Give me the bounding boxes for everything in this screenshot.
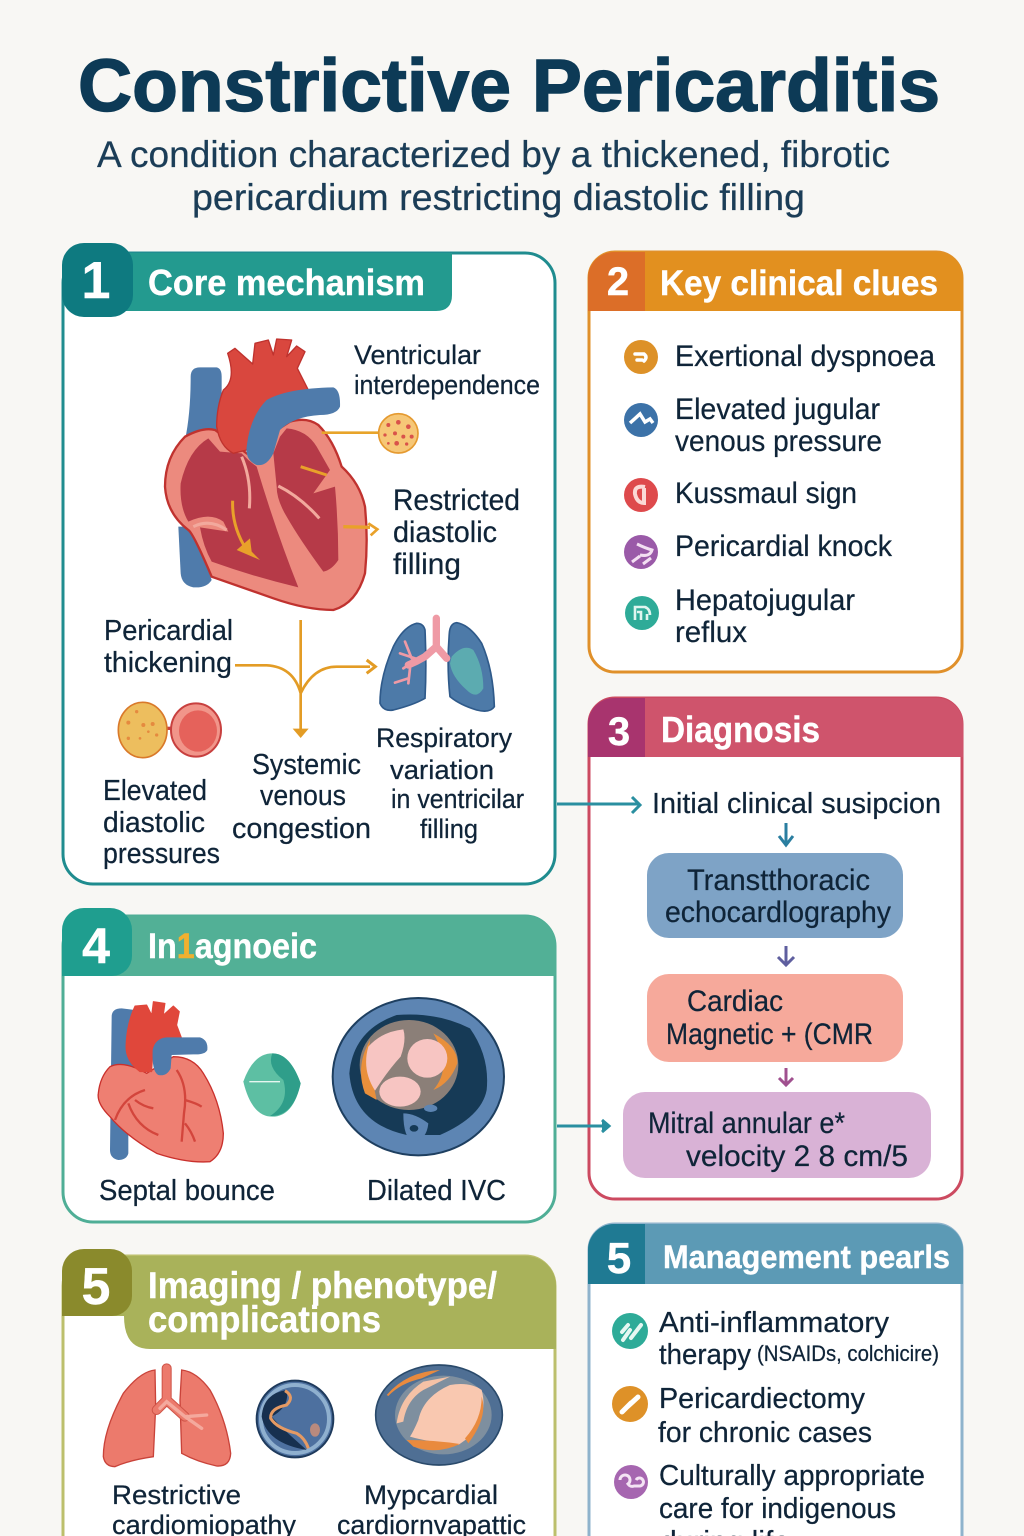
box: transthoracic echocardiography [647,853,903,938]
label: restrictive cardiomyopathy: Restrictive [112,1480,241,1510]
box: mitral annular velocity: velocity 2 8 cm/5 [686,1140,908,1173]
label: pericardial thickening [104,615,233,679]
icon: heart cross-section [165,339,377,610]
item: kussmaul sign [624,477,857,512]
panel: management pearls [588,1224,963,1536]
label: restricted diastolic filling: Restricted [393,484,520,517]
header: management pearls: 5 [607,1234,631,1283]
item: pericardiectomy: Pericardiectomy [659,1383,865,1415]
box: mitral annular velocity: Mitral annular e* [648,1107,845,1140]
header: key clinical clues: Key clinical clues [660,264,938,303]
box: mitral annular velocity [623,1092,931,1178]
header: imaging phenotype complications: Imaging / phenotype/ [148,1265,497,1306]
label: ventricular interdependence: Ventricular [354,340,481,370]
item: pericardial knock [624,530,893,569]
arrow: to echocardiography [779,823,793,845]
item: pericardiectomy: for chronic cases [658,1417,872,1449]
item: hepatojugular reflux: reflux [675,616,747,649]
header: imaging phenotype complications [62,1249,556,1349]
label: elevated diastolic pressures [103,775,220,870]
header: imaging section four: In1agnoeic [148,927,317,966]
label: elevated diastolic pressures: Elevated [103,775,207,807]
label: respiratory variation: in ventricilar [391,784,524,814]
label: systemic venous congestion [232,749,371,845]
item: culturally appropriate care [614,1460,925,1536]
icon: red lungs [103,1368,231,1467]
header: key clinical clues: 2 [607,260,629,304]
icon: elevated pressure chambers [118,702,221,758]
icon: axial CT scan [333,998,504,1155]
item: pericardiectomy [612,1383,872,1449]
header: imaging phenotype complications: 5 [82,1258,110,1316]
header: imaging section four: 4 [82,918,110,974]
label: myocardial cardiomyopathic: Mypcardial [364,1480,498,1510]
label: septal bounce: Septal bounce [99,1175,275,1207]
subtitle: pericardium restricting diastolic filling [192,177,805,218]
header: imaging phenotype complications: complications [148,1299,381,1340]
label: dilated IVC: Dilated IVC [367,1175,506,1207]
panel: imaging section four [62,908,556,1222]
label: restrictive cardiomyopathy [112,1480,297,1536]
label: respiratory variation: variation [390,755,494,785]
item: anti-inflammatory therapy: therapy [659,1339,751,1371]
header: diagnosis [588,698,963,757]
header: diagnosis: 3 [608,710,630,754]
icon: round scan [257,1381,333,1457]
label: elevated diastolic pressures: diastolic [103,807,205,839]
box: cardiac magnetic resonance [647,974,903,1062]
item: anti-inflammatory therapy: Anti-inflammatory [659,1307,889,1339]
arrow: to cardiac magnetic resonance [778,946,794,965]
arrow: core mechanism to diagnosis [557,797,640,813]
panel: diagnosis [588,698,963,1199]
label: systemic venous congestion: congestion [232,813,371,845]
item: culturally appropriate care: Culturally appropriate [659,1460,925,1492]
item: elevated jugular venous pressure [624,393,882,458]
box: cardiac magnetic resonance: Magnetic + (CMR [666,1018,873,1051]
item: culturally appropriate care: care for indigenous [659,1493,896,1525]
icon: external heart [98,1002,223,1162]
subtitle [97,134,890,218]
item: exertional dyspnoea: Exertional dyspnoea [675,340,935,373]
label: respiratory variation: filling [420,814,478,844]
label: restricted diastolic filling: diastolic [393,516,497,549]
box: transthoracic echocardiography: echocardlography [665,896,891,929]
panel: imaging phenotype complications [62,1249,556,1536]
icon: pericardial tissue callout [322,414,418,453]
item: hepatojugular reflux: Hepatojugular [675,584,855,617]
label: restricted diastolic filling [393,484,520,581]
header: core mechanism: 1 [82,252,110,310]
header: management pearls: Management pearls [663,1239,950,1275]
icon: lungs [380,618,494,711]
arrow: imaging to mitral velocity [557,1120,609,1132]
arrow: to mitral annular velocity [779,1068,793,1085]
header: management pearls [588,1224,963,1284]
label: ventricular interdependence [354,340,540,400]
item: hepatojugular reflux [625,584,855,649]
header: core mechanism [62,243,452,317]
box: cardiac magnetic resonance: Cardiac [687,985,783,1018]
subtitle: A condition characterized by a thickened, fibrotic [97,134,890,175]
label: myocardial cardiomyopathic [337,1480,526,1536]
label: elevated diastolic pressures: pressures [103,838,220,870]
label: systemic venous congestion: Systemic [252,749,361,781]
header: imaging section four [62,908,556,976]
title: Constrictive Pericarditis [78,44,940,127]
header: core mechanism: Core mechanism [148,262,425,303]
arrow: branching flow [235,620,375,738]
item: kussmaul sign: Kussmaul sign [675,477,857,510]
panel: key clinical clues [588,252,963,672]
item: elevated jugular venous pressure: Elevated jugular [675,393,880,426]
label: restricted diastolic filling: filling [393,548,461,581]
icon: oval scan [376,1365,502,1465]
item: anti-inflammatory therapy: (NSAIDs, colchicire) [757,1341,939,1366]
icon: green valve [243,1053,301,1117]
item: anti-inflammatory therapy [612,1307,939,1371]
box: transthoracic echocardiography: Transtthoracic [687,864,870,897]
panel: core mechanism [62,243,555,884]
label: pericardial thickening: Pericardial [104,615,233,647]
item: elevated jugular venous pressure: venous pressure [675,425,882,458]
text: initial clinical suspicion: Initial clinical susipcion [652,788,941,820]
label: respiratory variation [376,723,524,844]
label: ventricular interdependence: interdependence [354,370,540,400]
label: systemic venous congestion: venous [260,780,346,812]
label: respiratory variation: Respiratory [376,723,512,753]
header: diagnosis: Diagnosis [661,709,820,750]
item: pericardial knock: Pericardial knock [675,530,893,563]
label: pericardial thickening: thickening [104,647,232,679]
header: key clinical clues [588,252,963,311]
